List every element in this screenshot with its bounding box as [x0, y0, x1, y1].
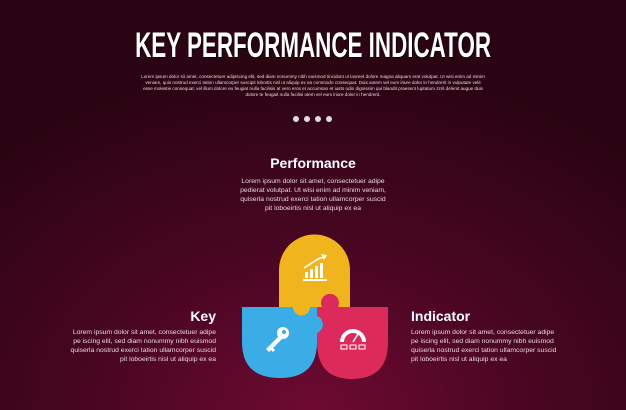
text: performance: pit loboeirtis nisl ut aliquip ex ea — [265, 205, 361, 212]
icon: chart — [303, 254, 327, 281]
text: indicator: pit loboeirtis nisl ut aliquip ex ea — [411, 356, 507, 363]
text: indicator: pe iscing elit, sed diam nonummy nibh euismod — [411, 338, 554, 345]
heading: performance: Performance — [270, 155, 356, 171]
piece: red indicator — [317, 294, 388, 379]
text: key: pit loboeirtis nisl ut aliquip ex ea — [120, 356, 216, 363]
text: indicator: quiserla nostrud exerci tation ullamcorper suscid — [411, 347, 556, 354]
piece: yellow performance — [279, 234, 350, 320]
icon: key — [266, 327, 289, 352]
piece: blue key — [242, 307, 323, 378]
panel: key — [70, 308, 216, 363]
heading: indicator: Indicator — [411, 308, 470, 324]
subtitle paragraph: Lorem ipsum dolor sit amet, consectetuer adipiscing elit, sed diam nonummy nibh euismod tincidunt ut laoreet dolore magna aliquam erat volutpat. Ut wisi enim ad minim veniam, quis nostrud exerci tation ullamcorper suscipit lobortis nisl ut aliquip ex ea commodo consequat. Duis autem vel eum iriure dolor in hendrerit in vulputate velit esse molestie consequat, vel illum dolore eu feugiat nulla facilisis at vero eros et accumsan et iusto odio dignissim qui blandit praesent luptatum zzril delenit augue duis dolore te feugait nulla facilisi utem vel eum iriure dolor in hendrerit. — [141, 74, 485, 97]
text: performance: Lorem ipsum dolor sit amet, consectetuer adipe — [241, 178, 385, 185]
text: key: quiserla nostrud exerci tation ullamcorper suscid — [71, 347, 216, 354]
text: indicator: Lorem ipsum dolor sit amet, consectetuer adipe — [411, 329, 554, 336]
text: indicator — [411, 329, 556, 363]
text: performance — [240, 178, 386, 212]
icon: gauge — [341, 331, 365, 349]
text: key: pe iscing elit, sed diam nonummy nibh euismod — [73, 338, 216, 345]
text: performance: pedierat volutpat. Ut wisi enim ad minim veniam, — [240, 187, 386, 194]
puzzle diagram — [242, 234, 388, 379]
title: KEY PERFORMANCE INDICATOR — [135, 26, 491, 65]
dots — [293, 116, 332, 122]
panel: performance — [240, 155, 386, 212]
text: key — [70, 329, 216, 363]
text: performance: quiserla nostrud exerci tation ullamcorper suscid — [240, 196, 386, 203]
panel: indicator — [411, 308, 556, 363]
heading: key: Key — [190, 308, 216, 324]
text: key: Lorem ipsum dolor sit amet, consectetuer adipe — [73, 329, 216, 336]
